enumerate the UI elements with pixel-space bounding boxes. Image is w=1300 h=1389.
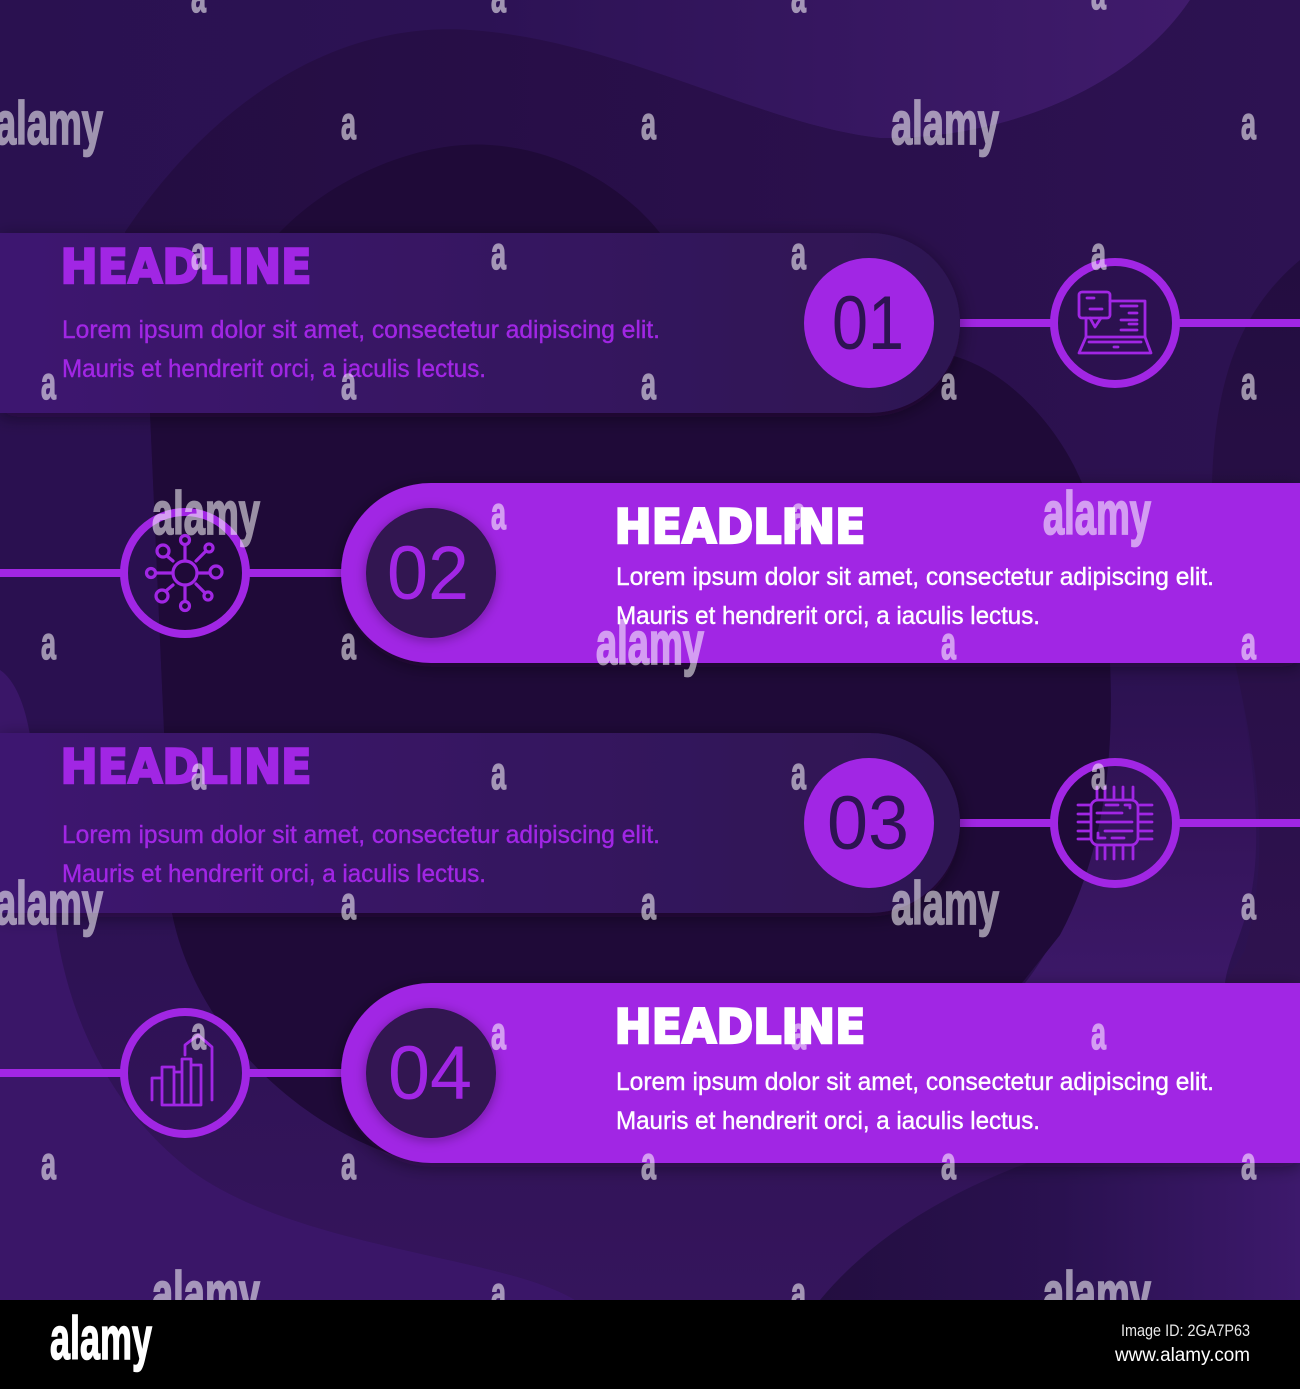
footer logo: alamy xyxy=(50,1305,152,1372)
watermark pattern: a xyxy=(1241,357,1256,409)
watermark pattern: a xyxy=(491,1007,506,1059)
watermark pattern: a xyxy=(791,747,806,799)
watermark pattern: a xyxy=(641,97,656,149)
image id: Image ID: 2GA7P63 xyxy=(1121,1321,1250,1340)
watermark pattern: a xyxy=(191,1007,206,1059)
watermark pattern: a xyxy=(1241,1137,1256,1189)
number badge 04: 04 xyxy=(388,1031,472,1116)
text block 01 xyxy=(62,316,660,383)
panel: row 03 xyxy=(0,733,960,913)
watermark pattern: alamy xyxy=(0,90,103,157)
watermark pattern: a xyxy=(941,357,956,409)
text block 04 xyxy=(616,1068,1214,1135)
text block 01: Lorem ipsum dolor sit amet, consectetur adipiscing elit. xyxy=(62,316,660,344)
number badge 02: 02 xyxy=(387,531,469,616)
text block 02: Mauris et hendrerit orci, a iaculis lectus. xyxy=(616,602,1040,630)
number badge 03: 03 xyxy=(827,781,909,866)
watermark pattern: alamy xyxy=(152,480,260,547)
text block 03: Lorem ipsum dolor sit amet, consectetur adipiscing elit. xyxy=(62,821,660,849)
panel: row 04 xyxy=(341,983,1300,1163)
watermark pattern: a xyxy=(41,1137,56,1189)
heading 03: HEADLINE xyxy=(60,740,312,795)
icon: network hub xyxy=(124,512,246,634)
watermark pattern: alamy xyxy=(891,870,999,937)
watermark pattern: a xyxy=(341,357,356,409)
row 03 connector lines xyxy=(960,819,1300,827)
watermark pattern: a xyxy=(341,97,356,149)
number badge 01 xyxy=(804,258,934,388)
number badge 03 xyxy=(804,758,934,888)
watermark pattern: a xyxy=(491,1267,506,1319)
watermark pattern: a xyxy=(1091,747,1106,799)
heading 04: HEADLINE xyxy=(614,1000,866,1055)
number badge 02 xyxy=(366,508,496,638)
watermark pattern: a xyxy=(341,877,356,929)
watermark pattern: a xyxy=(491,227,506,279)
watermark pattern: a xyxy=(491,487,506,539)
watermark pattern: a xyxy=(641,1137,656,1189)
panel: row 01 xyxy=(0,233,960,413)
watermark pattern: a xyxy=(191,227,206,279)
watermark pattern: a xyxy=(791,1007,806,1059)
watermark pattern: a xyxy=(1091,227,1106,279)
website: www.alamy.com xyxy=(1114,1345,1250,1366)
watermark pattern: alamy xyxy=(1043,1260,1151,1327)
icon: microchip xyxy=(1054,762,1176,884)
watermark pattern: alamy xyxy=(891,90,999,157)
text block 04: Lorem ipsum dolor sit amet, consectetur adipiscing elit. xyxy=(616,1068,1214,1096)
watermark pattern: a xyxy=(941,617,956,669)
watermark pattern: a xyxy=(1241,97,1256,149)
watermark pattern: a xyxy=(1091,1007,1106,1059)
row 02 connector lines xyxy=(0,569,345,577)
watermark pattern: a xyxy=(491,747,506,799)
row 01 connector lines xyxy=(960,319,1300,327)
watermark pattern: a xyxy=(1241,877,1256,929)
row 04 connector lines xyxy=(0,1069,345,1077)
watermark pattern: a xyxy=(41,617,56,669)
text block 04: Mauris et hendrerit orci, a iaculis lectus. xyxy=(616,1107,1040,1135)
text block 02: Lorem ipsum dolor sit amet, consectetur adipiscing elit. xyxy=(616,563,1214,591)
watermark pattern: a xyxy=(791,227,806,279)
watermark pattern: a xyxy=(1241,617,1256,669)
watermark pattern: a xyxy=(641,877,656,929)
watermark pattern: a xyxy=(641,357,656,409)
watermark pattern: alamy xyxy=(152,1260,260,1327)
watermark pattern: a xyxy=(341,1137,356,1189)
number badge 04 xyxy=(366,1008,496,1138)
heading 01: HEADLINE xyxy=(60,240,312,295)
watermark pattern: a xyxy=(791,487,806,539)
watermark pattern: a xyxy=(341,617,356,669)
icon: bar chart with spire xyxy=(124,1012,246,1134)
text block 01: Mauris et hendrerit orci, a iaculis lectus. xyxy=(62,355,486,383)
text block 02 xyxy=(616,563,1214,630)
watermark pattern: a xyxy=(941,1137,956,1189)
icon: laptop with chat bubble xyxy=(1054,262,1176,384)
number badge 01: 01 xyxy=(832,281,904,366)
watermark pattern: alamy xyxy=(596,610,704,677)
watermark pattern: a xyxy=(791,1267,806,1319)
text block 03: Mauris et hendrerit orci, a iaculis lectus. xyxy=(62,860,486,888)
heading 02: HEADLINE xyxy=(614,500,866,555)
watermark pattern: a xyxy=(191,747,206,799)
text block 03 xyxy=(62,821,660,888)
panel: row 02 xyxy=(341,483,1300,663)
watermark pattern: alamy xyxy=(1043,480,1151,547)
watermark pattern: a xyxy=(41,357,56,409)
watermark pattern: alamy xyxy=(0,870,103,937)
footer bar xyxy=(0,1300,1300,1389)
